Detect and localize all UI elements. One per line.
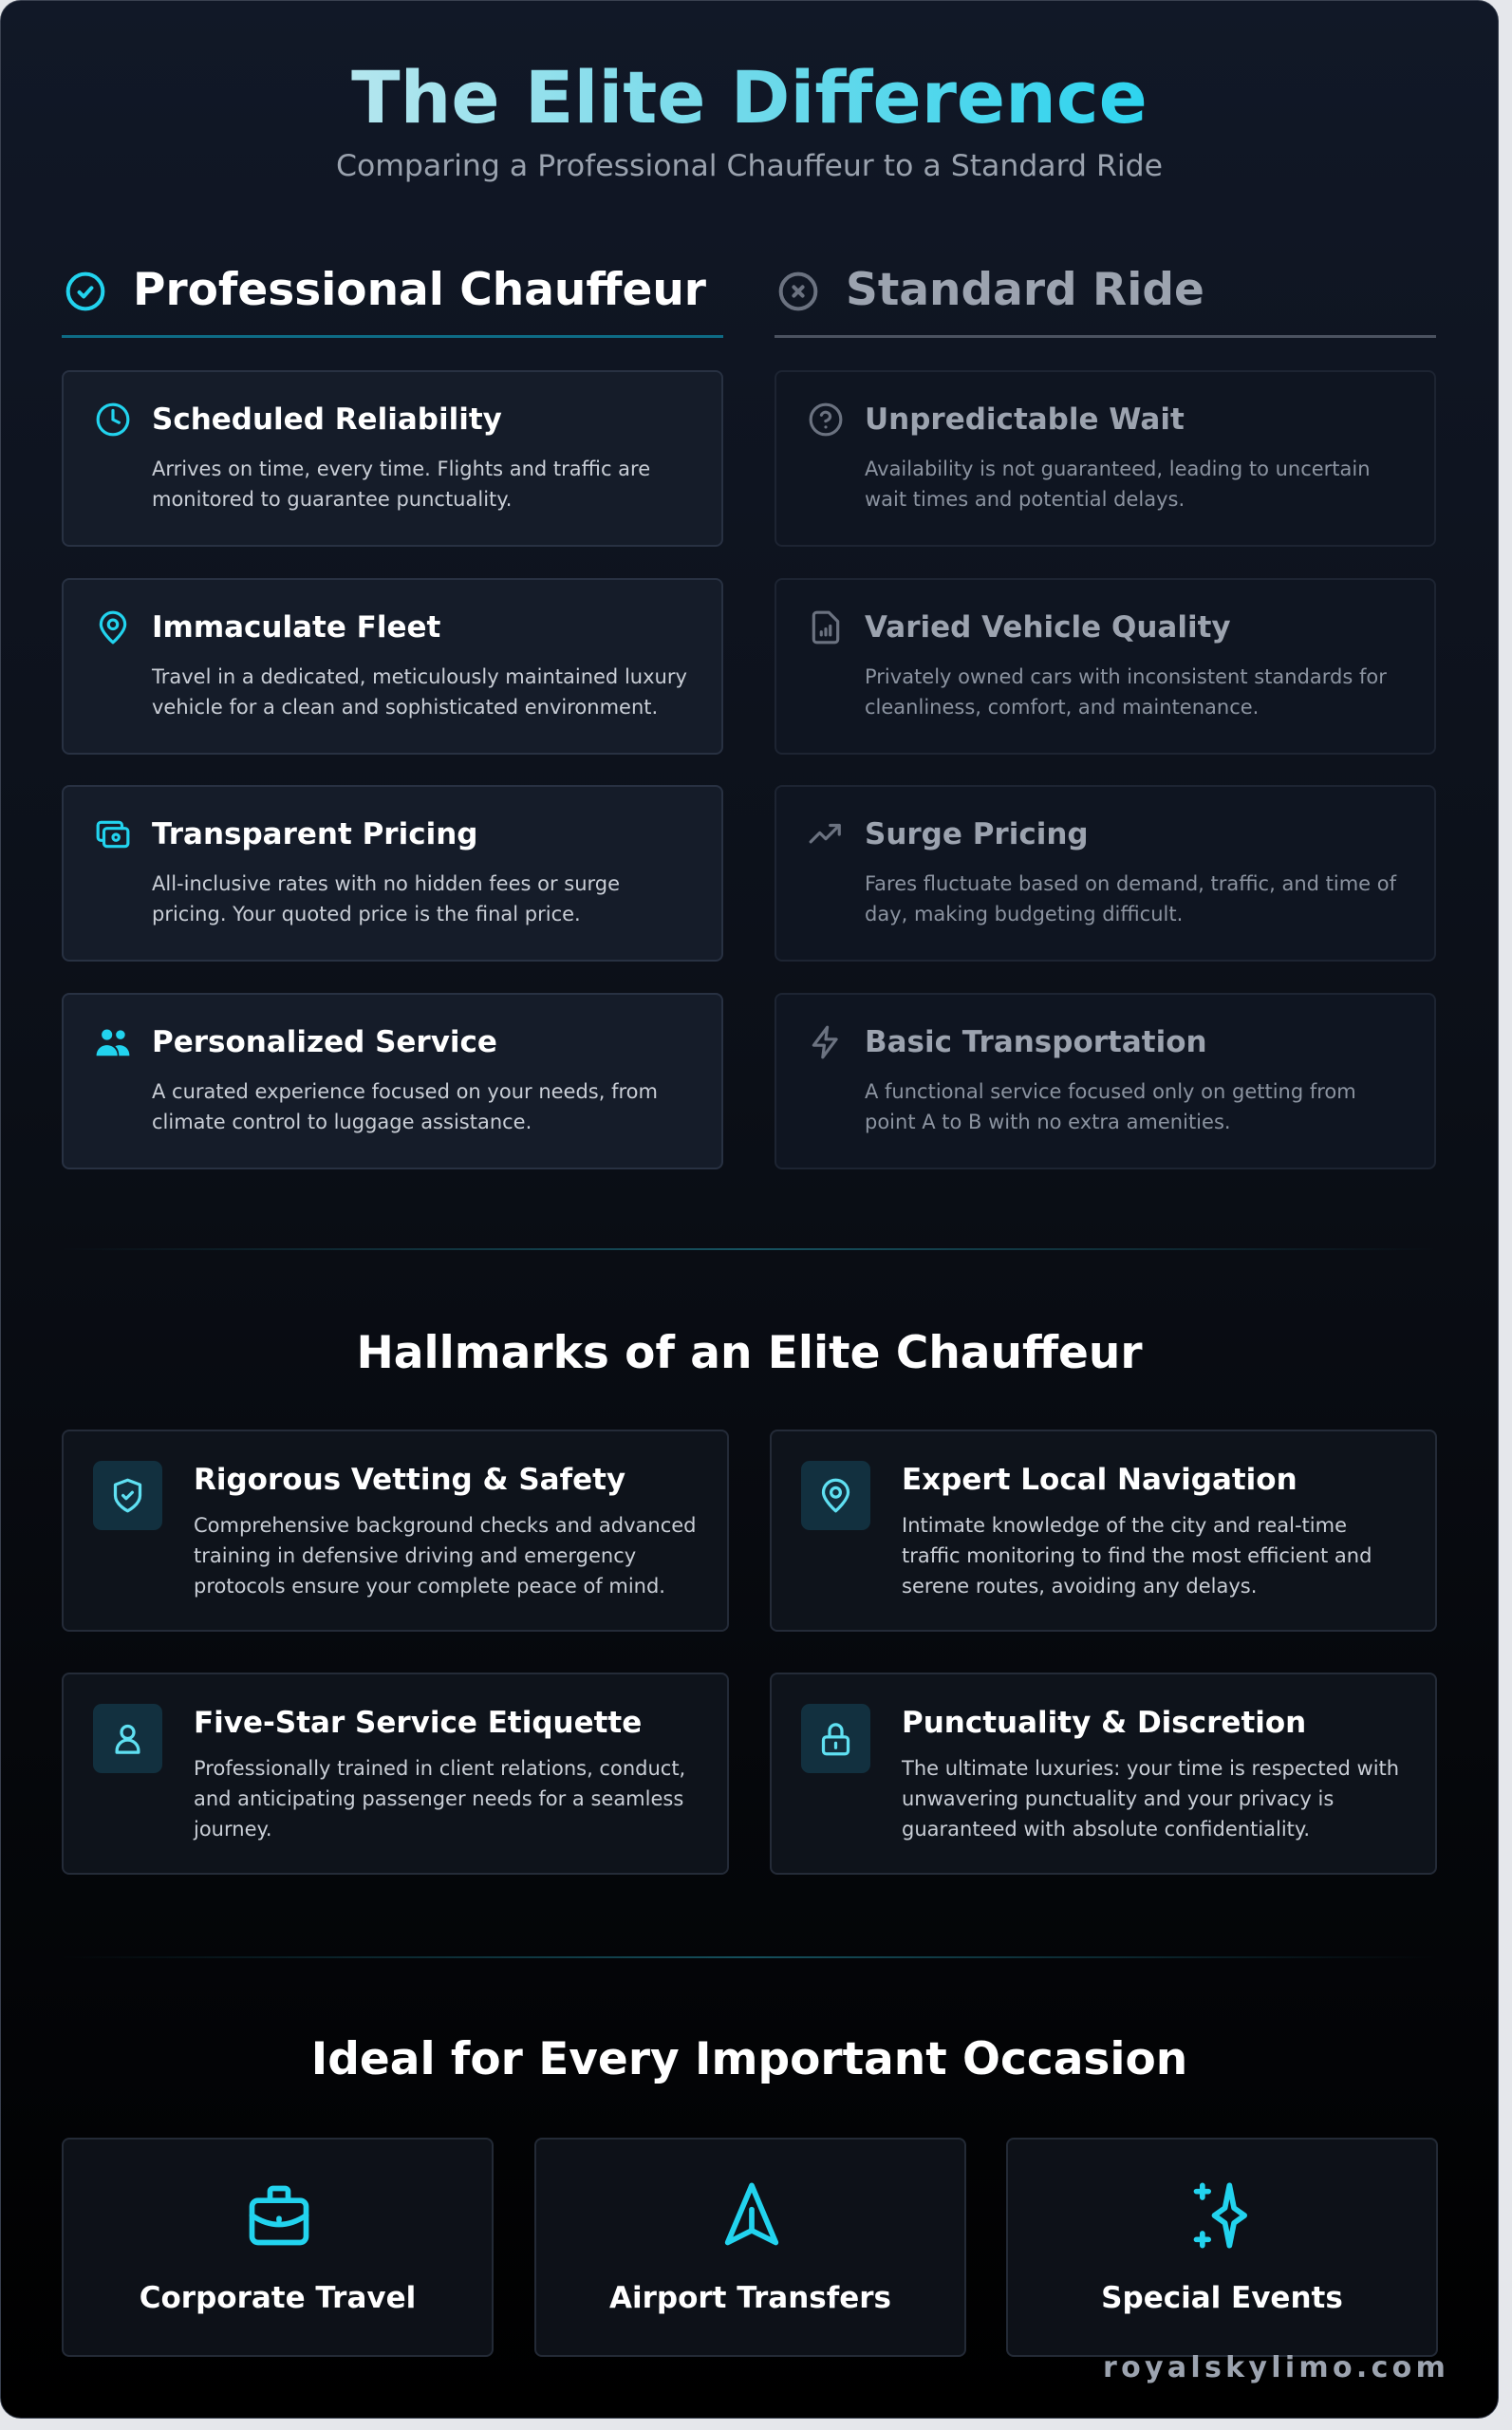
occasion card: airport transfers xyxy=(534,2138,966,2357)
hallmark card: vetting & safety: Rigorous Vetting & Safety xyxy=(194,1463,625,1497)
hallmark card: vetting & safety: Comprehensive background checks and advanced xyxy=(194,1514,697,1537)
hallmark card: service etiquette xyxy=(62,1673,729,1875)
card: personalized service xyxy=(62,993,723,1169)
icon: user xyxy=(93,1704,162,1773)
occasion card: corporate travel xyxy=(62,2138,494,2357)
watermark: royalskylimo.com xyxy=(1103,2351,1449,2384)
icon: file chart xyxy=(812,611,839,644)
card: unpredictable wait: Availability is not guaranteed, leading to uncertain xyxy=(865,458,1371,480)
hallmark card: punctuality & discretion: Punctuality & Discretion xyxy=(902,1706,1306,1740)
hallmark card: punctuality & discretion xyxy=(770,1673,1437,1875)
hallmark card: vetting & safety xyxy=(62,1430,729,1632)
icon: lock xyxy=(801,1704,870,1773)
card: surge pricing xyxy=(775,785,1436,962)
hallmark card: punctuality & discretion: The ultimate luxuries: your time is respected with xyxy=(902,1757,1399,1780)
icon: users xyxy=(97,1029,129,1056)
hallmark card: local navigation: Intimate knowledge of the city and real-time xyxy=(902,1514,1347,1537)
icon: clock xyxy=(97,402,129,437)
subtitle: Comparing a Professional Chauffeur to a Standard Ride xyxy=(336,149,1163,183)
card: immaculate fleet: Travel in a dedicated, meticulously maintained luxury xyxy=(152,665,687,688)
card: surge pricing: day, making budgeting difficult. xyxy=(865,903,1183,925)
card: personalized service: Personalized Service xyxy=(152,1025,497,1059)
card: unpredictable wait: Unpredictable Wait xyxy=(865,402,1185,437)
icon: shield check xyxy=(93,1461,162,1530)
hallmark card: vetting & safety: protocols ensure your complete peace of mind. xyxy=(194,1575,665,1598)
card: basic transportation: point A to B with no extra amenities. xyxy=(865,1111,1231,1133)
card: surge pricing: Fares fluctuate based on demand, traffic, and time of xyxy=(865,872,1396,895)
hallmark card: local navigation xyxy=(770,1430,1437,1632)
card: immaculate fleet: Immaculate Fleet xyxy=(152,610,440,645)
icon: question circle xyxy=(809,402,843,437)
icon: cash xyxy=(97,820,129,849)
icon: trending up xyxy=(809,824,841,844)
hallmark card: punctuality & discretion: unwavering punctuality and your privacy is xyxy=(902,1787,1334,1810)
hallmark card: service etiquette: Professionally trained in client relations, conduct, xyxy=(194,1757,685,1780)
icon: navigation arrow xyxy=(725,2183,778,2246)
card: scheduled reliability: Arrives on time, every time. Flights and traffic are xyxy=(152,458,650,480)
card: varied vehicle quality xyxy=(775,578,1436,755)
hallmark card: local navigation: Expert Local Navigation xyxy=(902,1463,1297,1497)
card: scheduled reliability: Scheduled Reliability xyxy=(152,402,502,437)
card: basic transportation xyxy=(775,993,1436,1169)
card: transparent pricing xyxy=(62,785,723,962)
icon: sparkles xyxy=(1194,2183,1247,2248)
card: immaculate fleet: vehicle for a clean and sophisticated environment. xyxy=(152,696,658,719)
card: varied vehicle quality: Privately owned cars with inconsistent standards for xyxy=(865,665,1387,688)
icon: map pin xyxy=(801,1461,870,1530)
card: surge pricing: Surge Pricing xyxy=(865,817,1089,851)
hallmark card: service etiquette: and anticipating passenger needs for a seamless xyxy=(194,1787,683,1810)
column header: professional chauffeur xyxy=(62,264,723,338)
icon: briefcase xyxy=(249,2185,309,2246)
hallmark card: vetting & safety: training in defensive driving and emergency xyxy=(194,1544,636,1567)
hallmark card: punctuality & discretion: guaranteed with absolute confidentiality. xyxy=(902,1818,1310,1841)
card: unpredictable wait: wait times and potential delays. xyxy=(865,488,1185,511)
occasion card: special events: Special Events xyxy=(1101,2281,1343,2315)
card: scheduled reliability: monitored to guarantee punctuality. xyxy=(152,488,512,511)
card: personalized service: climate control to luggage assistance. xyxy=(152,1111,532,1133)
column header: standard ride xyxy=(775,264,1436,338)
occasion card: airport transfers: Airport Transfers xyxy=(609,2281,891,2315)
card: basic transportation: Basic Transportation xyxy=(865,1025,1207,1059)
column header: standard ride: Standard Ride xyxy=(846,264,1204,316)
card: scheduled reliability xyxy=(62,370,723,547)
hallmark card: service etiquette: Five-Star Service Etiquette xyxy=(194,1706,642,1740)
icon: lightning xyxy=(812,1025,838,1059)
card: transparent pricing: Transparent Pricing xyxy=(152,817,477,851)
title: The Elite Difference xyxy=(351,56,1148,140)
card: basic transportation: A functional service focused only on getting from xyxy=(865,1080,1356,1103)
card: transparent pricing: All-inclusive rates with no hidden fees or surge xyxy=(152,872,620,895)
card: varied vehicle quality: cleanliness, comfort, and maintenance. xyxy=(865,696,1259,719)
hallmark card: local navigation: traffic monitoring to find the most efficient and xyxy=(902,1544,1372,1567)
occasion card: corporate travel: Corporate Travel xyxy=(140,2281,416,2315)
card: transparent pricing: pricing. Your quoted price is the final price. xyxy=(152,903,581,925)
hallmark card: local navigation: serene routes, avoiding any delays. xyxy=(902,1575,1257,1598)
heading: occasions: Ideal for Every Important Occasion xyxy=(311,2033,1187,2085)
card: unpredictable wait xyxy=(775,370,1436,547)
icon: map pin xyxy=(99,611,127,644)
column header: professional chauffeur: Professional Chauffeur xyxy=(133,264,706,316)
heading: hallmarks: Hallmarks of an Elite Chauffeur xyxy=(356,1327,1143,1379)
hallmark card: service etiquette: journey. xyxy=(194,1818,272,1841)
icon: check circle xyxy=(66,271,104,311)
card: varied vehicle quality: Varied Vehicle Quality xyxy=(865,610,1231,645)
icon: x circle xyxy=(778,271,818,311)
card: personalized service: A curated experience focused on your needs, from xyxy=(152,1080,658,1103)
occasion card: special events xyxy=(1006,2138,1438,2357)
card: immaculate fleet xyxy=(62,578,723,755)
